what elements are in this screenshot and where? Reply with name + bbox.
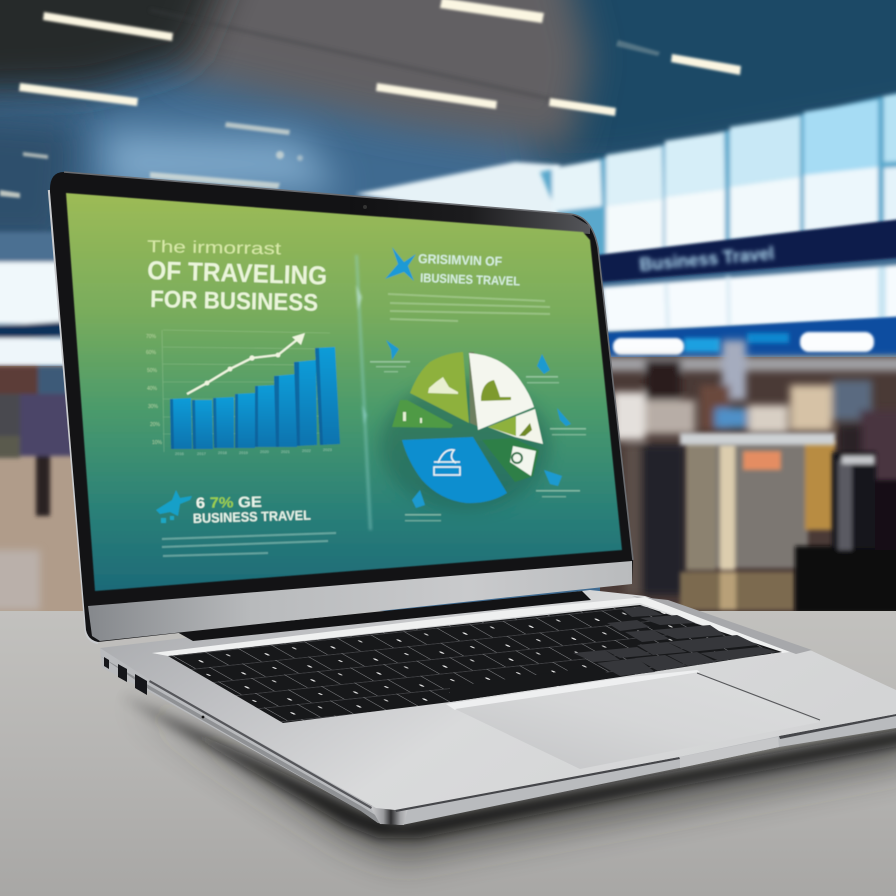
blue strip with white lights — [606, 316, 896, 358]
strip between keyboard and trackpad — [446, 670, 700, 710]
lower right windows — [602, 264, 896, 332]
base rim — [100, 648, 896, 825]
x-axis labels: 2020 — [260, 449, 270, 454]
right heading text: IBUSINES TRAVEL — [420, 271, 521, 288]
y-axis labels — [146, 334, 163, 446]
icon: plane cluster — [156, 490, 192, 523]
icon: plane — [385, 247, 416, 281]
y-axis labels: 60% — [146, 350, 157, 356]
left heading: FOR BUSINESS — [150, 286, 318, 317]
ceiling lights — [0, 0, 741, 198]
right heading text: GRISIMVIN OF — [418, 251, 502, 269]
bars — [170, 347, 340, 449]
left heading: The irmorrast — [147, 237, 282, 258]
x-axis labels — [175, 447, 333, 456]
segment: light green — [392, 400, 453, 428]
lid outer silver edge — [49, 190, 98, 643]
side ports — [104, 657, 147, 695]
stat body copy — [162, 532, 336, 557]
segment: olive green — [410, 352, 469, 423]
annotation: middle right — [550, 408, 586, 435]
left heading: OF TRAVELING — [147, 255, 328, 291]
ceiling — [0, 0, 896, 250]
segment: blue — [402, 437, 507, 503]
deck surface — [100, 590, 896, 810]
silver chin — [88, 561, 632, 641]
y-axis labels: 50% — [147, 368, 158, 374]
sign text: Business Travel — [639, 243, 775, 275]
x-axis labels: 2023 — [323, 447, 333, 452]
x-axis labels: 2022 — [302, 448, 312, 453]
white keyboard trim — [152, 597, 790, 656]
right heading text — [418, 251, 521, 288]
annotation: bottom — [405, 490, 441, 521]
y-axis labels: 10% — [152, 440, 163, 446]
crowd and floor on left — [0, 366, 100, 616]
crowd and counter on right — [600, 340, 896, 613]
x-axis labels: 2019 — [239, 450, 249, 455]
vertical divider — [355, 255, 372, 530]
annotation: top left — [370, 340, 410, 372]
right body copy — [388, 293, 550, 322]
chart gridlines — [162, 330, 330, 452]
y-axis labels: 20% — [150, 422, 161, 428]
trend arrow — [187, 333, 305, 394]
check-in counter — [680, 433, 835, 610]
segment: dark green sliver — [469, 352, 482, 428]
laptop base — [100, 590, 896, 825]
pie shadow — [380, 380, 550, 510]
segment: dark green and white — [482, 438, 539, 482]
x-axis labels: 2017 — [197, 451, 207, 456]
terminal sign band — [598, 218, 896, 282]
y-axis labels: 30% — [148, 404, 159, 410]
screen bezel — [50, 172, 633, 642]
front notch — [680, 737, 779, 768]
y-axis labels: 40% — [147, 386, 158, 392]
background: blurred airport terminal — [0, 0, 896, 620]
camera dot — [363, 205, 367, 209]
trackpad — [455, 673, 820, 769]
suitcase — [795, 452, 896, 613]
pie annotations — [370, 340, 586, 521]
annotation: lower right — [536, 470, 580, 497]
x-axis labels: 2016 — [175, 451, 185, 456]
desk surface — [0, 611, 896, 896]
shadow under laptop — [120, 695, 896, 858]
space bar — [450, 667, 618, 702]
screen infographic — [66, 193, 622, 591]
keyboard — [168, 605, 782, 723]
x-axis labels: 2021 — [281, 449, 291, 454]
stat text: BUSINESS TRAVEL — [193, 508, 311, 526]
y-axis labels: 70% — [146, 334, 157, 340]
strip behind keyboard right — [632, 596, 812, 654]
stat text — [193, 494, 311, 526]
pie chart — [380, 352, 550, 510]
bar chart — [146, 330, 340, 456]
hinge slot — [177, 591, 591, 641]
segment: small green and white — [488, 409, 543, 444]
navigation and function keys — [573, 607, 778, 676]
left windows — [0, 232, 90, 368]
right heading — [385, 247, 550, 322]
center bright windows above laptop — [355, 162, 560, 225]
bottom-left stat — [156, 490, 336, 557]
bar shading — [170, 348, 323, 449]
x-axis labels: 2018 — [218, 450, 228, 455]
left heading — [147, 237, 328, 317]
upper right windows — [540, 88, 896, 262]
stat text: 6 7% GE — [196, 494, 262, 512]
segment: white — [469, 353, 534, 430]
laptop lid — [49, 172, 633, 643]
annotation: top right — [526, 354, 559, 383]
